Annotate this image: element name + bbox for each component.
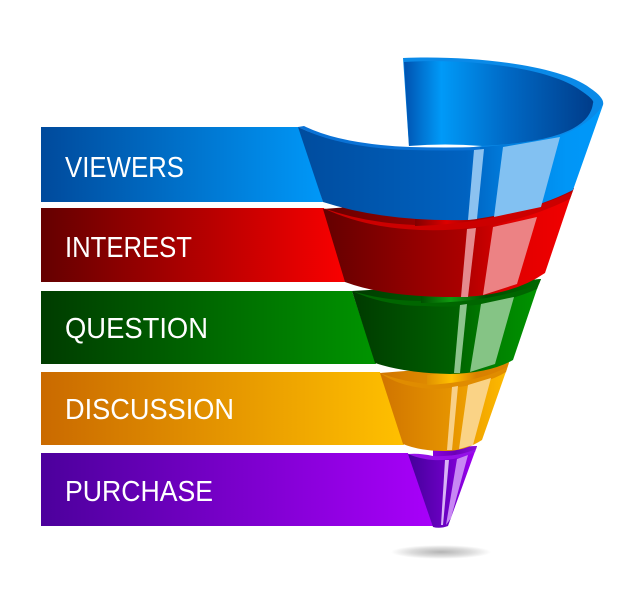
glare: wide <box>494 137 560 217</box>
bar: question: QUESTION <box>65 313 208 345</box>
drop shadow under funnel <box>391 545 491 559</box>
bar: purchase <box>41 453 433 526</box>
funnel segment: discussion <box>380 362 509 451</box>
funnel segment: interest <box>323 188 574 297</box>
funnel segment: purchase <box>408 446 477 528</box>
glare: narrow <box>468 149 484 220</box>
bar: discussion: DISCUSSION <box>65 394 234 426</box>
bar: question <box>41 291 376 364</box>
funnel segment: viewers <box>298 57 603 220</box>
bar: interest <box>41 208 346 282</box>
funnel segment: question <box>352 279 541 374</box>
bar: viewers <box>41 127 323 202</box>
bar: discussion <box>41 372 404 445</box>
bar: purchase: PURCHASE <box>65 476 213 508</box>
gap below inner wall <box>409 144 482 149</box>
funnel front rim edge <box>298 126 480 150</box>
funnel front wall <box>298 105 603 220</box>
bar: viewers: VIEWERS <box>65 152 184 184</box>
funnel top rim <box>403 57 603 148</box>
funnel back inner wall <box>404 61 593 146</box>
bar: interest: INTEREST <box>65 232 192 264</box>
